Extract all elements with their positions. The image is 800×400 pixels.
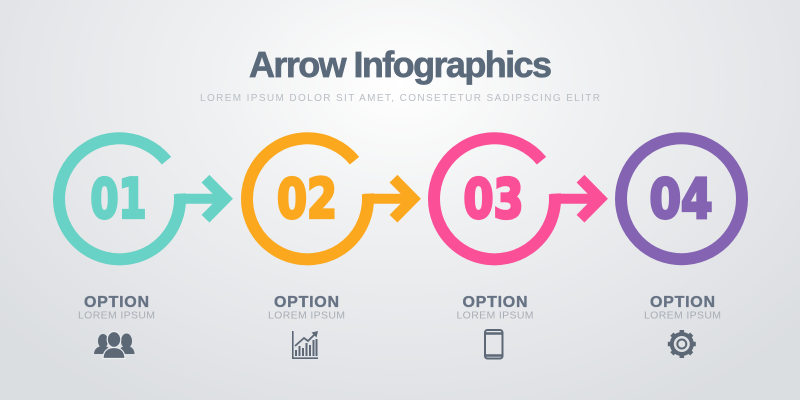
- option 3 label: OPTION: [462, 294, 528, 311]
- step 1 number: 01: [90, 168, 146, 231]
- step 3 ring and arrow: [434, 138, 600, 259]
- icon: people: [94, 332, 134, 358]
- option 4 label: [644, 294, 721, 322]
- option 1 label: [78, 294, 155, 322]
- step 1 ring and arrow: [59, 138, 225, 259]
- icon: growth chart: [293, 331, 318, 358]
- option 2 label: LOREM IPSUM: [268, 310, 345, 322]
- step 4 number: 04: [650, 168, 712, 231]
- option 3 label: [456, 294, 534, 322]
- option 4 label: OPTION: [650, 294, 715, 311]
- option 2 label: [268, 294, 345, 322]
- option 1 label: OPTION: [84, 294, 149, 311]
- option 2 label: OPTION: [274, 294, 339, 311]
- option 4 label: LOREM IPSUM: [644, 310, 721, 322]
- title: Arrow Infographics: [249, 44, 552, 85]
- step 2 number: 02: [277, 168, 337, 231]
- step 3 number: 03: [464, 168, 524, 231]
- option 3 label: LOREM IPSUM: [456, 310, 534, 322]
- step 4 ring: [621, 138, 742, 259]
- icon: gear: [668, 330, 696, 358]
- option 1 label: LOREM IPSUM: [78, 310, 155, 322]
- step 2 ring and arrow: [247, 138, 413, 259]
- subtitle: LOREM IPSUM DOLOR SIT AMET, CONSETETUR SADIPSCING ELITR: [200, 93, 600, 104]
- icon: smartphone: [485, 330, 502, 358]
